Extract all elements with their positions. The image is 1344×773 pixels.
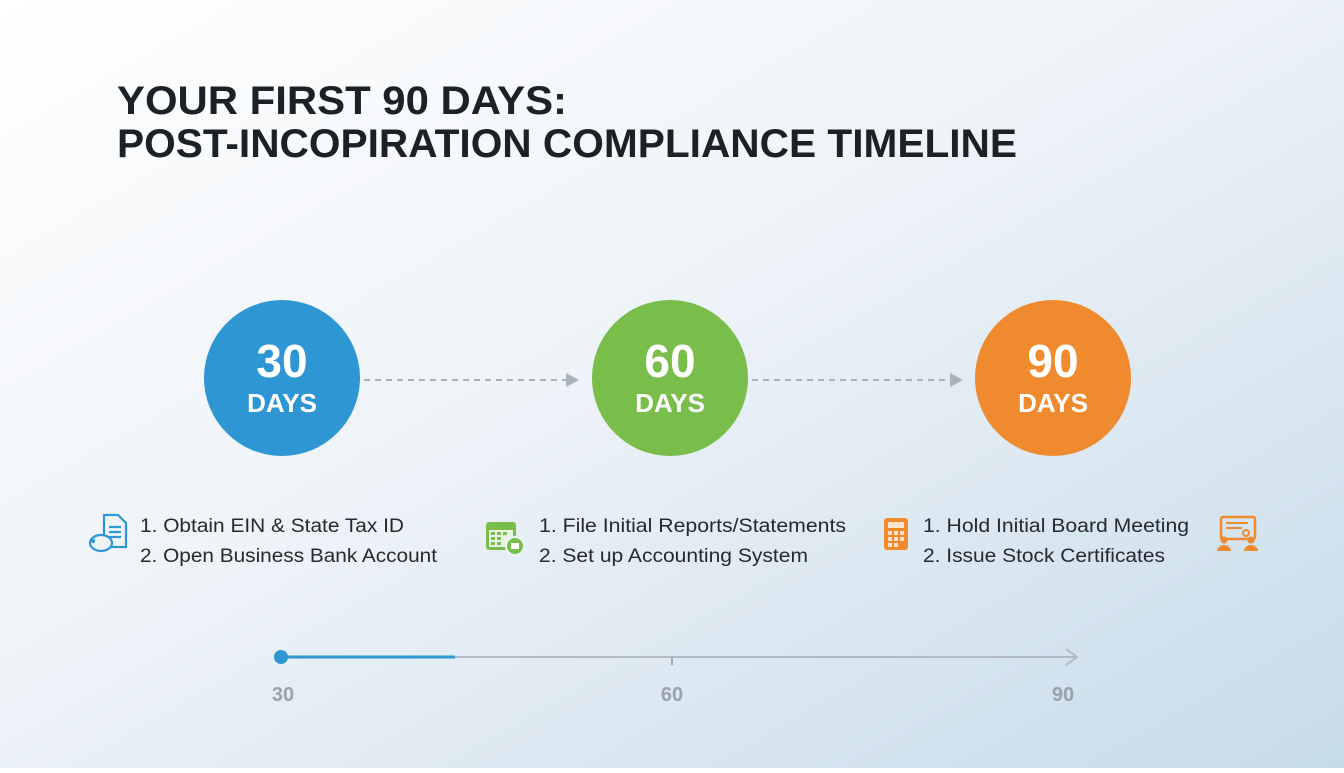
- title: [117, 79, 1017, 166]
- arrow: 60 to 90: [752, 373, 963, 387]
- text: 60 day tasks: 1. File Initial Reports/Statements: [539, 516, 846, 537]
- circle: 30 days: 30: [256, 335, 308, 387]
- circle: 60 days: 60: [644, 335, 696, 387]
- timeline labels: 90: [1052, 684, 1074, 706]
- title: POST-INCOPIRATION COMPLIANCE TIMELINE: [117, 122, 1017, 166]
- arrow: 30 to 60: [364, 373, 579, 387]
- circle: 90 days: DAYS: [1018, 388, 1088, 418]
- icon: calendar: [486, 522, 524, 555]
- text: 60 day tasks: [539, 516, 846, 567]
- text: 30 day tasks: [140, 516, 438, 567]
- text: 90 day tasks: 2. Issue Stock Certificates: [923, 546, 1165, 567]
- timeline labels: 30: [272, 684, 294, 706]
- icon: calculator: [884, 518, 908, 550]
- text: 90 day tasks: [923, 516, 1189, 567]
- title: YOUR FIRST 90 DAYS:: [117, 79, 567, 123]
- text: 30 day tasks: 2. Open Business Bank Account: [140, 546, 438, 567]
- circle: 30 days: [204, 300, 360, 456]
- text: 90 day tasks: 1. Hold Initial Board Meeting: [923, 516, 1189, 537]
- bottom timeline: [274, 649, 1077, 665]
- text: 30 day tasks: 1. Obtain EIN & State Tax ID: [140, 516, 404, 537]
- circle: 90 days: 90: [1027, 335, 1079, 387]
- circle: 60 days: [592, 300, 748, 456]
- icon: certificate with people: [1217, 517, 1258, 551]
- circle: 30 days: DAYS: [247, 388, 317, 418]
- timeline labels: 60: [661, 684, 683, 706]
- circle: 60 days: DAYS: [635, 388, 705, 418]
- timeline labels: [272, 684, 1074, 706]
- text: 60 day tasks: 2. Set up Accounting System: [539, 546, 808, 567]
- circle: 90 days: [975, 300, 1131, 456]
- icon: document with piggy bank: [90, 515, 126, 551]
